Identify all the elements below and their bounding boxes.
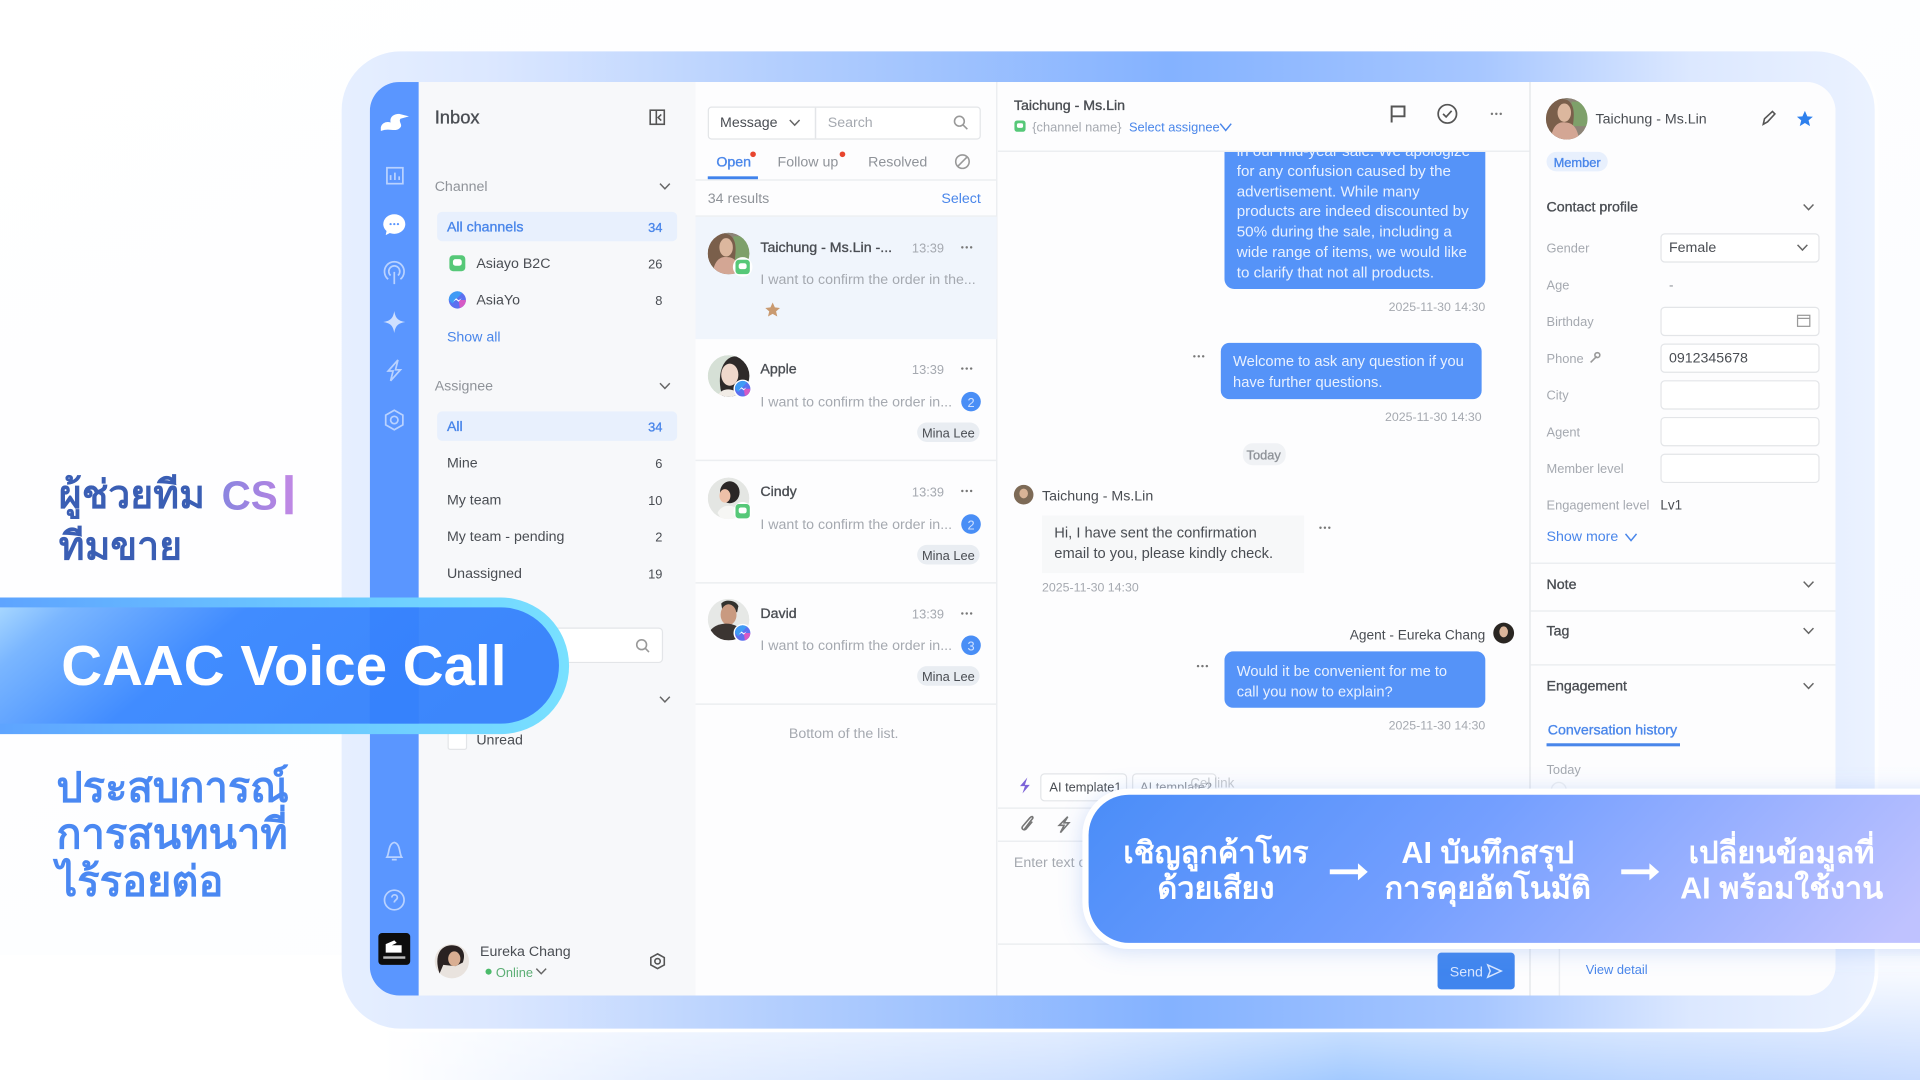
channel: all channels: All channels bbox=[447, 219, 523, 235]
conversation history tab bbox=[1547, 723, 1680, 746]
show more link: Show more bbox=[1547, 529, 1618, 545]
sidebar bbox=[370, 82, 419, 996]
assignee: all: 34 bbox=[648, 419, 662, 434]
status tabs: Resolved bbox=[868, 154, 927, 170]
status tabs: Follow up bbox=[778, 154, 838, 170]
current user: Eureka Chang bbox=[480, 944, 571, 960]
step 2 bbox=[1385, 836, 1591, 907]
field: birthday: Birthday bbox=[1547, 314, 1594, 329]
field: age bbox=[1547, 277, 1673, 292]
field: agent: Agent bbox=[1547, 424, 1581, 439]
outgoing message 1 bbox=[1224, 152, 1486, 311]
results count: 34 results bbox=[708, 191, 769, 207]
conversation: Taichung bbox=[696, 217, 997, 339]
outgoing message 3: 2025-11-30 14:30 bbox=[1389, 719, 1485, 733]
icon: collapse panel bbox=[650, 110, 664, 124]
conversation: David: Mina Lee bbox=[922, 669, 975, 684]
title banner bbox=[0, 598, 569, 734]
conversation: Cindy: I want to confirm the order in... bbox=[760, 517, 952, 533]
member tag bbox=[1547, 152, 1608, 171]
status tabs: Open bbox=[716, 154, 751, 170]
member tag: Member bbox=[1554, 155, 1601, 170]
assignee: unassigned: 19 bbox=[648, 566, 662, 581]
app window bbox=[370, 82, 1836, 996]
outgoing message 2: 2025-11-30 14:30 bbox=[1385, 410, 1482, 424]
workspace logo bbox=[378, 933, 410, 965]
conversation: Apple: Mina Lee bbox=[922, 425, 975, 440]
left subheading: seamless experience bbox=[52, 763, 289, 905]
icon: broadcast bbox=[384, 262, 404, 284]
conversation: Apple bbox=[708, 355, 981, 442]
date separator: Today bbox=[1247, 448, 1281, 463]
conversation: Apple: Apple bbox=[760, 361, 797, 377]
left subheading: seamless experience: ไร้รอยต่อ bbox=[52, 857, 223, 905]
composer toolbar bbox=[1022, 817, 1069, 833]
panel: inbox filters bbox=[419, 82, 696, 996]
conversation: Cindy: Mina Lee bbox=[922, 548, 975, 563]
incoming message: Hi, I have sent the confirmation bbox=[1054, 525, 1257, 541]
channel: all channels bbox=[437, 212, 677, 241]
icon: logo bbox=[381, 114, 409, 131]
icon: resolve bbox=[1438, 105, 1457, 123]
field: engagement level: Engagement level bbox=[1547, 498, 1649, 513]
conversation: Cindy: 13:39 bbox=[912, 484, 944, 499]
step 3: AI พร้อมใช้งาน bbox=[1680, 870, 1883, 905]
icon: analytics bbox=[387, 168, 403, 184]
inbox heading: Inbox bbox=[435, 107, 480, 128]
outer gradient frame bbox=[342, 51, 1878, 1032]
channel: all channels: 34 bbox=[648, 220, 662, 235]
left subheading: seamless experience: ประสบการณ์ bbox=[56, 763, 289, 810]
AI template chips: AI template1 bbox=[1049, 779, 1121, 794]
assignee: all: All bbox=[447, 419, 463, 435]
field: birthday bbox=[1547, 307, 1819, 336]
assignee: my team bbox=[448, 495, 662, 508]
panel: contact profile: Taichung - Ms.Lin bbox=[1596, 112, 1707, 128]
assignee: my team pending bbox=[448, 531, 662, 544]
field: gender bbox=[1547, 234, 1819, 262]
note section bbox=[1547, 577, 1813, 593]
assignee: my team: 10 bbox=[648, 493, 662, 508]
arrow 2 bbox=[1621, 863, 1659, 880]
conversation: David: 3 bbox=[967, 639, 975, 654]
conversation: David: 13:39 bbox=[912, 607, 944, 622]
outgoing message 2 bbox=[1193, 343, 1482, 424]
step 1: เชิญลูกค้าโทร bbox=[1123, 834, 1309, 872]
conversation: Cindy: Cindy bbox=[760, 484, 798, 500]
search bar bbox=[708, 107, 980, 139]
outgoing message 1: advertisement. While many bbox=[1237, 183, 1420, 200]
field: gender: Female bbox=[1669, 240, 1716, 256]
incoming message: 2025-11-30 14:30 bbox=[1042, 580, 1139, 594]
field: gender: Gender bbox=[1547, 241, 1590, 256]
panel: contact profile bbox=[1530, 82, 1836, 996]
icon: bell bbox=[387, 842, 402, 860]
outgoing message 3: Would it be convenient for me to bbox=[1237, 664, 1447, 680]
incoming message: email to you, please kindly check. bbox=[1054, 546, 1273, 562]
field: age: Age bbox=[1547, 277, 1569, 292]
unread filter: Unread bbox=[476, 732, 523, 748]
conversation history tab: Conversation history bbox=[1548, 723, 1678, 739]
field: agent bbox=[1547, 418, 1819, 446]
icon: edit bbox=[1763, 111, 1775, 124]
icon: sparkle bbox=[383, 311, 405, 333]
banner title: CAAC Voice Call bbox=[61, 634, 506, 697]
search box bbox=[558, 628, 663, 663]
history date: Today bbox=[1547, 762, 1581, 777]
left subheading: seamless experience: การสนทนาที่ bbox=[56, 804, 288, 857]
left heading: CS and sales: ทีมขาย bbox=[59, 525, 182, 568]
outgoing message 2: have further questions. bbox=[1233, 375, 1382, 391]
unread filter bbox=[448, 734, 522, 750]
search bar: Message bbox=[720, 115, 778, 131]
icon: settings bbox=[386, 410, 403, 430]
icon: flag bbox=[1392, 107, 1404, 122]
AI template chips bbox=[1020, 774, 1235, 801]
field: phone bbox=[1547, 344, 1819, 372]
incoming message: Taichung - Ms.Lin bbox=[1042, 489, 1153, 505]
engagement section: Engagement bbox=[1547, 678, 1627, 694]
assignee: mine: 6 bbox=[655, 456, 662, 471]
view detail link: View detail bbox=[1586, 962, 1648, 977]
left heading: CS and sales bbox=[59, 472, 293, 568]
assignee: mine bbox=[448, 458, 662, 468]
field: phone: 0912345678 bbox=[1669, 350, 1748, 366]
assignee: all bbox=[437, 411, 677, 441]
conversation: Cindy: 2 bbox=[967, 517, 975, 532]
icon: favourite bbox=[1797, 111, 1813, 126]
field: engagement level: Lv1 bbox=[1660, 498, 1682, 513]
conversation: Apple: 2 bbox=[967, 395, 975, 410]
left heading: CS and sales: ผู้ช่วยทีม bbox=[59, 474, 205, 519]
conversation: David: David bbox=[760, 606, 797, 622]
outgoing message 1: wide range of items, we would like bbox=[1236, 244, 1467, 261]
results count: Select bbox=[941, 191, 981, 207]
field: city: City bbox=[1547, 388, 1569, 403]
step 1: ด้วยเสียง bbox=[1157, 871, 1274, 905]
conversation: Apple: I want to confirm the order in... bbox=[760, 394, 952, 410]
outgoing message 3 bbox=[1197, 623, 1514, 733]
field: member level bbox=[1547, 454, 1819, 482]
conversation: Taichung: Taichung - Ms.Lin -... bbox=[760, 240, 892, 256]
assignee: my team pending: My team - pending bbox=[447, 529, 564, 545]
panel: chat thread bbox=[998, 82, 1529, 989]
step 3: เปลี่ยนข้อมูลที่ bbox=[1689, 831, 1875, 872]
chat header bbox=[998, 82, 1529, 151]
channel: Asiayo B2C: Asiayo B2C bbox=[476, 256, 550, 272]
message input placeholder: Enter text or bbox=[1014, 855, 1091, 871]
current user: Online bbox=[496, 965, 533, 980]
end of list note: Bottom of the list. bbox=[789, 726, 898, 742]
date separator bbox=[1243, 443, 1286, 465]
field: member level: Member level bbox=[1547, 461, 1624, 476]
assignee: my team: My team bbox=[447, 492, 501, 508]
outgoing message 2: Welcome to ask any question if you bbox=[1233, 354, 1464, 370]
tag section: Tag bbox=[1547, 623, 1569, 639]
conversation: Taichung: 13:39 bbox=[912, 241, 944, 256]
chat header: {channel name} bbox=[1032, 119, 1122, 134]
outgoing message 3: Agent - Eureka Chang bbox=[1350, 628, 1485, 643]
outgoing message 1: for any confusion caused by the bbox=[1237, 163, 1451, 180]
incoming message bbox=[1014, 485, 1331, 594]
workflow banner bbox=[1082, 789, 1920, 949]
status tabs bbox=[708, 151, 969, 179]
chat header: Taichung - Ms.Lin bbox=[1014, 98, 1125, 114]
engagement section bbox=[1547, 678, 1813, 694]
current user bbox=[435, 944, 664, 980]
assignee heading: Assignee bbox=[435, 378, 493, 394]
channel: AsiaYo bbox=[449, 291, 662, 309]
channel: Asiayo B2C: 26 bbox=[648, 257, 662, 272]
icon: help bbox=[384, 890, 404, 910]
conversation: Taichung: I want to confirm the order in the... bbox=[760, 272, 976, 288]
outgoing message 1: 2025-11-30 14:30 bbox=[1389, 300, 1485, 314]
results count bbox=[708, 193, 981, 203]
assignee: unassigned bbox=[448, 568, 662, 581]
send button: Send bbox=[1450, 964, 1483, 980]
step 3 bbox=[1680, 831, 1883, 905]
outgoing message 1: in our mid-year sale. We apologize bbox=[1237, 143, 1470, 160]
conversation: Cindy bbox=[708, 478, 981, 564]
arrow 1 bbox=[1330, 863, 1368, 880]
AI template chips: Cel link bbox=[1190, 776, 1235, 791]
tag section bbox=[1547, 623, 1813, 639]
icon: chat bbox=[383, 214, 405, 235]
channel: AsiaYo: AsiaYo bbox=[476, 293, 520, 309]
outgoing message 1: products are indeed discounted by bbox=[1237, 203, 1469, 220]
outgoing message 1: to clarify that not all products. bbox=[1237, 265, 1434, 282]
panel: conversation list bbox=[696, 82, 997, 996]
step 1 bbox=[1123, 834, 1309, 905]
field: age: - bbox=[1669, 277, 1673, 292]
contact profile heading: Contact profile bbox=[1547, 200, 1638, 216]
assignee: unassigned: Unassigned bbox=[447, 566, 522, 582]
outgoing message 3: call you now to explain? bbox=[1237, 685, 1393, 701]
outgoing message 1: 50% during the sale, including a bbox=[1237, 224, 1452, 241]
field: city bbox=[1547, 381, 1819, 409]
conversation: David bbox=[708, 599, 981, 686]
AI template chips: AI template2 bbox=[1140, 779, 1212, 794]
step 2: AI บันทึกสรุป bbox=[1401, 836, 1574, 872]
channel: Asiayo B2C bbox=[449, 255, 662, 272]
conversation: David: I want to confirm the order in... bbox=[760, 638, 952, 654]
send button bbox=[1438, 953, 1515, 989]
channel heading: Channel bbox=[435, 179, 488, 195]
note section: Note bbox=[1547, 577, 1577, 593]
conversation: Apple: 13:39 bbox=[912, 362, 944, 377]
left heading: CS and sales: CS bbox=[222, 472, 278, 518]
icon: lightning bbox=[388, 360, 400, 381]
field: phone: Phone bbox=[1547, 351, 1584, 366]
assignee: my team pending: 2 bbox=[655, 530, 662, 545]
chat header: Select assignee bbox=[1129, 119, 1220, 134]
show all link: Show all bbox=[447, 329, 501, 345]
assignee: mine: Mine bbox=[447, 456, 478, 472]
channel: AsiaYo: 8 bbox=[655, 293, 662, 308]
bottom gradient band bbox=[0, 955, 1920, 1080]
search bar: Search bbox=[828, 115, 873, 131]
step 2: การคุยอัตโนมัติ bbox=[1385, 869, 1591, 907]
